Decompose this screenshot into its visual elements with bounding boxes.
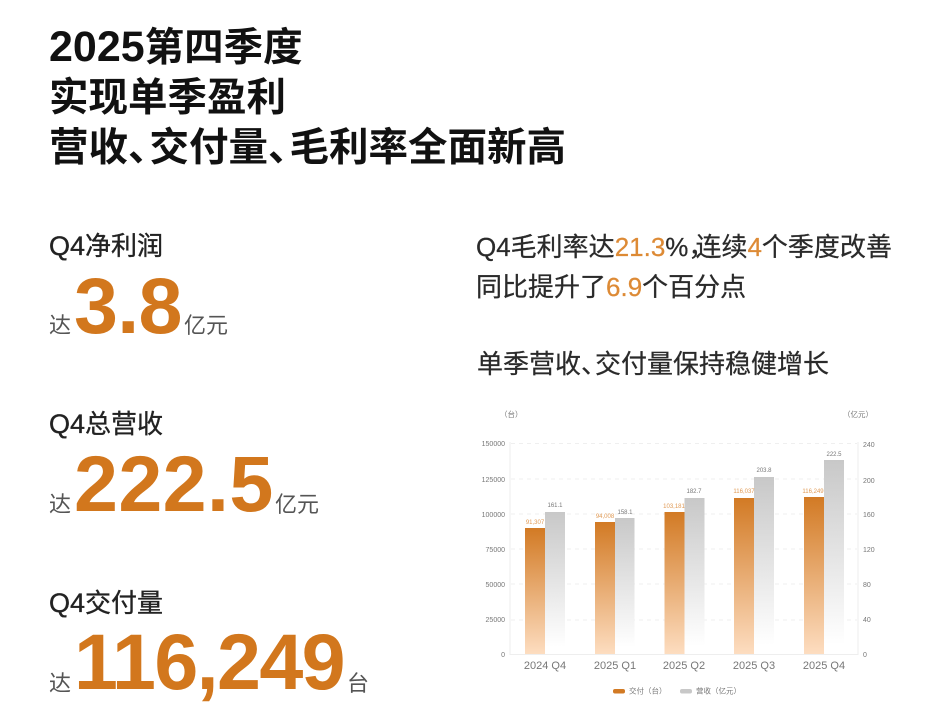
left axis labels [482,441,505,659]
right axis labels: 80 [863,582,871,589]
title: 营收、交付量、毛利率全面新高 [49,126,566,170]
chart heading: 单季营收、交付量保持稳健增长 [477,349,829,379]
quarter labels: 2025 Q3 [733,660,775,672]
right axis labels: 200 [863,478,875,485]
left axis labels: 0 [501,652,505,659]
left axis labels: 75000 [486,547,505,554]
stat: Q4 total revenue: 222.5 [74,439,274,528]
left axis labels: 50000 [486,582,505,589]
quarter labels [524,660,845,672]
stat: Q4 net profit: 亿元 [184,313,228,338]
stat: Q4 total revenue [49,409,319,528]
gray value labels: 182.7 [686,489,702,495]
axis units: （亿元） [843,409,873,419]
left axis labels: 125000 [482,477,505,484]
bar chart: deliveries and revenue [482,409,875,696]
right axis labels: 40 [863,617,871,624]
stat: Q4 deliveries: Q4交付量 [49,588,163,618]
title [49,23,566,170]
orange delivery bars [525,497,824,654]
left axis labels: 150000 [482,441,505,448]
right axis labels [863,442,875,659]
orange value labels: 116,037 [733,489,755,495]
legend: 交付（台） [629,686,666,696]
stat: Q4 deliveries: 达 [49,671,71,696]
quarter labels: 2024 Q4 [524,660,566,672]
axis units: （台） [500,409,522,419]
legend [613,686,741,696]
stat: Q4 net profit: 达 [49,313,71,338]
gray value labels [547,452,842,516]
right axis labels: 120 [863,547,875,554]
stat: Q4 net profit: 3.8 [74,261,182,350]
stat: Q4 total revenue: Q4总营收 [49,409,163,439]
gray revenue bars [545,460,844,654]
gross margin text: Q4毛利率达21.3%，连续4个季度改善 [476,232,892,262]
orange value labels: 94,008 [596,514,615,520]
quarter labels: 2025 Q1 [594,660,636,672]
gray value labels: 222.5 [826,452,842,458]
stat: Q4 net profit: Q4净利润 [49,231,163,261]
gray value labels: 161.1 [547,503,563,509]
orange value labels: 116,249 [802,489,824,495]
left axis labels: 25000 [486,617,505,624]
quarter labels: 2025 Q2 [663,660,705,672]
stat: Q4 total revenue: 达 [49,492,71,517]
stat: Q4 deliveries: 台 [347,671,369,696]
axis units [500,409,873,419]
stat: Q4 deliveries: 116,249 [74,617,344,706]
title: 实现单季盈利 [49,76,286,120]
orange value labels: 91,307 [526,520,545,526]
title: 2025第四季度 [49,23,303,71]
left axis labels: 100000 [482,512,505,519]
right axis labels: 0 [863,652,867,659]
gray value labels: 158.1 [617,510,633,516]
right axis labels: 240 [863,442,875,449]
right axis labels: 160 [863,512,875,519]
stat: Q4 total revenue: 亿元 [275,492,319,517]
orange value labels [526,489,824,526]
gray value labels: 203.8 [756,468,772,474]
legend: 营收（亿元） [696,686,741,696]
orange value labels: 103,181 [663,504,686,510]
gross margin text: 同比提升了6.9个百分点 [476,272,746,302]
stat: Q4 deliveries [49,588,369,706]
gross margin text [476,232,892,302]
quarter labels: 2025 Q4 [803,660,845,672]
stat: Q4 net profit [49,231,228,350]
